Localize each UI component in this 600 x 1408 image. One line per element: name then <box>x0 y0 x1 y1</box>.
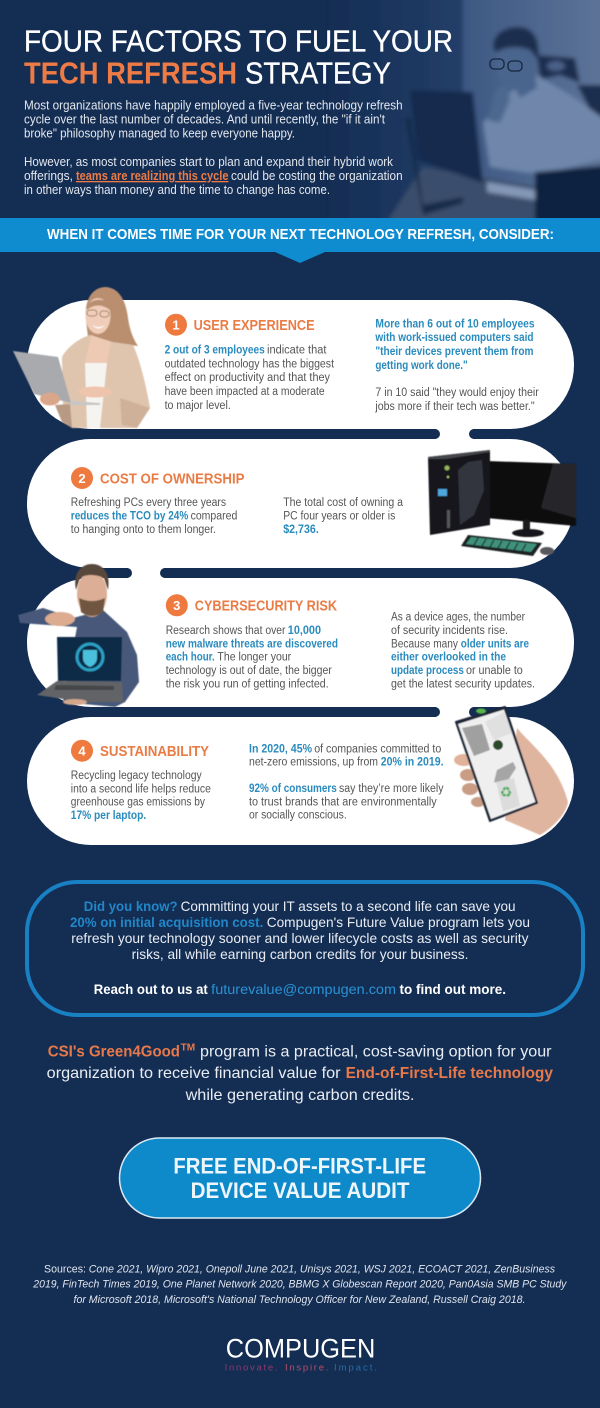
number badge 4 <box>71 740 93 762</box>
button: device value audit: FREE END-OF-FIRST-LIFE <box>173 1154 426 1178</box>
text block: right: More than 6 out of 10 employees <box>375 318 535 330</box>
intro text: teams are realizing this cycle <box>76 168 228 183</box>
heading: cybersecurity risk: CYBERSECURITY RISK <box>195 599 337 615</box>
text block: left: new malware threats are discovered <box>166 638 338 650</box>
number badge 4: 4 <box>78 744 86 758</box>
text block: left <box>166 625 338 690</box>
text block: right: In 2020, 45% <box>249 743 312 755</box>
logo: Compugen: Inspire. <box>285 1362 328 1374</box>
panel: sustainability <box>71 707 568 835</box>
callout: did you know <box>27 882 583 1015</box>
text block: right: to trust brands that are environmentally <box>249 796 437 808</box>
text block: right: jobs more if their tech was better." <box>374 401 535 413</box>
text block: right: 92% of consumers <box>249 783 337 795</box>
text block: right <box>249 743 444 822</box>
sources <box>32 1264 568 1306</box>
photo: woman with laptop <box>13 287 150 428</box>
photo: hand holding phone <box>454 707 568 835</box>
text block: right: $2,736. <box>283 524 319 536</box>
text block: right: net-zero emissions, up from <box>249 757 378 769</box>
photo: man with laptop <box>18 564 139 707</box>
heading: cost of ownership: COST OF OWNERSHIP <box>100 472 245 488</box>
text block: right: 7 in 10 said "they would enjoy their <box>375 387 539 399</box>
text block: right <box>391 612 535 690</box>
logo: Compugen: COMPUGEN <box>226 1334 375 1364</box>
text block: left: each hour. <box>166 652 215 664</box>
text block: left <box>71 770 211 822</box>
banner <box>0 218 600 263</box>
text block: left: 10,000 <box>288 625 321 637</box>
text block: left: the risk you run of getting infected. <box>166 678 329 690</box>
sources: 2019, FinTech Times 2019, One Planet Network 2020, BBMG X Globescan Report 2020, Pan0Asia SMB PC Study <box>32 1278 568 1290</box>
text block: right: with work-issued computers said <box>375 332 534 344</box>
number badge 2 <box>71 467 93 489</box>
text block: right: As a device ages, the number <box>391 612 525 624</box>
text block: right: PC four years or older is <box>283 510 396 522</box>
banner: WHEN IT COMES TIME FOR YOUR NEXT TECHNOLOGY REFRESH, CONSIDER: <box>47 226 554 243</box>
intro text: in other ways than money and the time to change has come. <box>24 182 330 197</box>
callout: did you know: to find out more. <box>400 981 506 997</box>
text block: right: get the latest security updates. <box>391 678 535 690</box>
text block: right <box>283 497 404 536</box>
intro text: However, as most companies start to plan and expand their hybrid work <box>24 154 393 169</box>
text block: right: getting work done." <box>375 360 468 372</box>
sources: Sources: <box>44 1264 86 1276</box>
logo: Compugen: Innovate. <box>225 1362 278 1374</box>
photo: desktop computer <box>428 450 576 556</box>
heading: user experience: USER EXPERIENCE <box>194 318 315 334</box>
text block: right: update process <box>391 665 464 677</box>
text block: Green4Good program: program is a practical, cost-saving option for your <box>200 1044 552 1060</box>
text block: right: "their devices prevent them from <box>375 346 534 358</box>
panel: cybersecurity risk <box>18 564 535 707</box>
text block: right <box>374 318 539 413</box>
text block: right: of security incidents rise. <box>391 625 508 637</box>
intro text: cycle over the last number of decades. And until recently, the "if it ain't <box>24 112 385 126</box>
text block: left: effect on productivity and that they <box>165 372 330 384</box>
text block: right: or unable to <box>466 665 523 677</box>
text block: left: compared <box>191 510 237 522</box>
text block: right: either overlooked in the <box>391 652 506 664</box>
callout: did you know: risks, all while earning carbon credits for your business. <box>132 946 468 962</box>
text block: left: 2 out of 3 employees <box>165 344 265 356</box>
title <box>24 24 453 90</box>
text block: left: to hanging onto to them longer. <box>71 524 216 536</box>
button: device value audit <box>120 1138 480 1218</box>
callout: did you know: futurevalue@compugen.com <box>211 981 396 997</box>
text block: Green4Good program: TM <box>181 1042 195 1054</box>
text block: Green4Good program: while generating carbon credits. <box>185 1087 414 1104</box>
text block: left: into a second life helps reduce <box>71 783 211 795</box>
intro text: could be costing the organization <box>231 168 403 183</box>
text block: left: 17% per laptop. <box>71 810 146 822</box>
text block: Green4Good program <box>47 1042 553 1104</box>
text block: right: of companies committed to <box>314 743 441 755</box>
text block: left: outdated technology has the biggest <box>165 358 335 370</box>
title: TECH REFRESH <box>24 56 237 90</box>
intro text: broke" philosophy managed to keep everyone happy. <box>24 126 295 140</box>
sources: Cone 2021, Wipro 2021, Onepoll June 2021, Unisys 2021, WSJ 2021, ECOACT 2021, ZenBusiness <box>89 1264 555 1276</box>
header photo: man at a desk <box>376 0 600 218</box>
callout: did you know: Did you know? <box>84 898 178 914</box>
text block: left: The longer your <box>217 652 291 664</box>
text block: right: 20% in 2019. <box>381 757 444 769</box>
white pill panels <box>27 300 574 845</box>
number badge 1: 1 <box>172 318 180 332</box>
sources: for Microsoft 2018, Microsoft's National Technology Officer for New Zealand, Russell Craig 2018. <box>74 1294 525 1306</box>
text block: left: reduces the TCO by 24% <box>71 510 188 522</box>
text block: right: or socially conscious. <box>249 810 347 822</box>
text block: Green4Good program: End-of-First-Life technology <box>346 1065 553 1082</box>
callout: did you know: Reach out to us at <box>94 981 208 997</box>
text block: left: Recycling legacy technology <box>71 770 202 782</box>
number badge 3 <box>166 594 188 616</box>
text block: right: Because many <box>391 638 458 650</box>
text block: left: to major level. <box>165 400 231 412</box>
callout: did you know: refresh your technology sooner and lower lifecycle costs as well as security <box>71 930 528 946</box>
text block: left <box>71 497 237 536</box>
panel: user experience <box>13 287 539 428</box>
text block: left: technology is out of date, the bigger <box>166 665 332 677</box>
callout: did you know: 20% on initial acquisition cost. <box>70 914 263 930</box>
panel: cost of ownership <box>71 450 576 556</box>
callout: did you know: Committing your IT assets to a second life can save you <box>181 898 516 914</box>
photo: hand holding phone: ♻ <box>500 785 512 801</box>
text block: right: older units are <box>461 638 529 650</box>
intro text: Most organizations have happily employed a five-year technology refresh <box>24 98 403 112</box>
text block: right: say they’re more likely <box>339 783 444 795</box>
logo: Compugen: Impact. <box>334 1362 377 1374</box>
number badge 1 <box>165 314 187 336</box>
title: STRATEGY <box>245 56 391 90</box>
intro text <box>24 98 403 197</box>
text block: right: The total cost of owning a <box>283 497 404 509</box>
text block: left <box>165 344 335 412</box>
number badge 2: 2 <box>78 471 86 486</box>
text block: left: Refreshing PCs every three years <box>71 497 226 509</box>
text block: Green4Good program: organization to receive financial value for <box>47 1065 341 1082</box>
text block: left: greenhouse gas emissions by <box>71 797 205 809</box>
text block: left: have been impacted at a moderate <box>165 386 325 398</box>
number badge 3: 3 <box>173 598 180 613</box>
text block: left: Research shows that over <box>166 625 286 637</box>
title: FOUR FACTORS TO FUEL YOUR <box>24 24 453 58</box>
heading: sustainability: SUSTAINABILITY <box>100 744 209 760</box>
text block: Green4Good program: CSI's Green4Good <box>48 1044 180 1060</box>
button: device value audit: DEVICE VALUE AUDIT <box>191 1178 410 1203</box>
callout: did you know: Compugen's Future Value program lets you <box>267 914 530 930</box>
text block: left: indicate that <box>267 344 327 356</box>
intro text: offerings, <box>24 168 73 183</box>
